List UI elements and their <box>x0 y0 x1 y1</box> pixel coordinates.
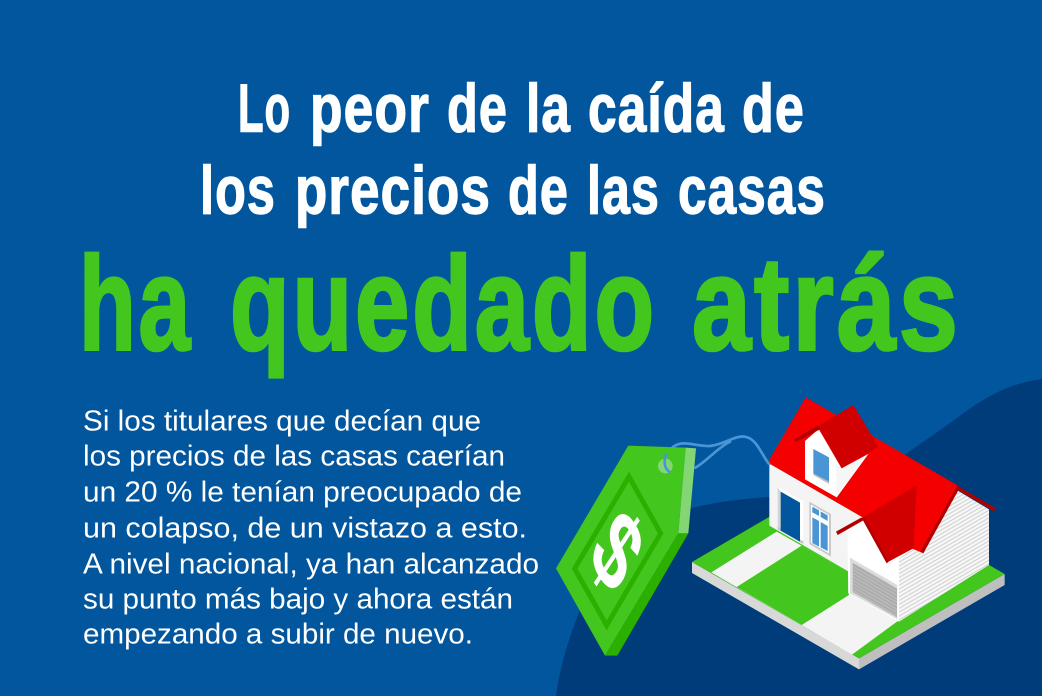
garage door <box>850 558 897 619</box>
body paragraph: Si los titulares que decían que <box>83 406 481 438</box>
body paragraph: su punto más bajo y ahora están <box>83 584 513 616</box>
tag inner diamond <box>575 477 661 625</box>
body paragraph <box>83 406 539 651</box>
body paragraph: un 20 % le tenían preocupado de <box>83 477 522 509</box>
title: white lines: los <box>200 153 276 229</box>
body paragraph: los precios de las casas caerían <box>83 441 505 473</box>
lot base <box>692 477 1005 669</box>
title: green highlight <box>79 230 961 378</box>
body paragraph: empezando a subir de nuevo. <box>83 619 473 651</box>
window <box>809 502 831 557</box>
illustration: price tag and house <box>556 397 1005 669</box>
title: white lines: peor <box>310 70 430 146</box>
title: white lines: las <box>587 153 660 229</box>
main roof <box>768 397 996 563</box>
title: green highlight: atrás <box>692 230 961 378</box>
dark curved background shape <box>556 379 1042 696</box>
title: white lines: de <box>742 70 805 146</box>
title: white lines: Lo <box>238 70 291 146</box>
title: white lines: casas <box>678 153 826 229</box>
tag body <box>556 446 686 656</box>
dormer <box>794 405 878 497</box>
title: white lines: precios <box>295 153 491 229</box>
title: white lines: de <box>508 153 569 229</box>
title: white lines <box>200 70 826 229</box>
title: white lines: de <box>447 70 508 146</box>
door <box>778 487 803 544</box>
icon: price tag <box>556 436 769 656</box>
title: green highlight: quedado <box>230 230 657 378</box>
title: white lines: caída <box>588 70 725 146</box>
body paragraph: un colapso, de un vistazo a esto. <box>83 513 527 545</box>
icon: house on lot <box>692 397 1005 669</box>
dollar sign: $ <box>574 486 659 616</box>
tag string <box>665 436 769 472</box>
title: green highlight: ha <box>79 230 193 378</box>
lower gable roof <box>836 485 917 563</box>
title: white lines: la <box>526 70 571 146</box>
house walls <box>769 463 989 622</box>
tag hole <box>658 459 673 473</box>
body paragraph: A nivel nacional, ya han alcanzado <box>83 549 539 581</box>
